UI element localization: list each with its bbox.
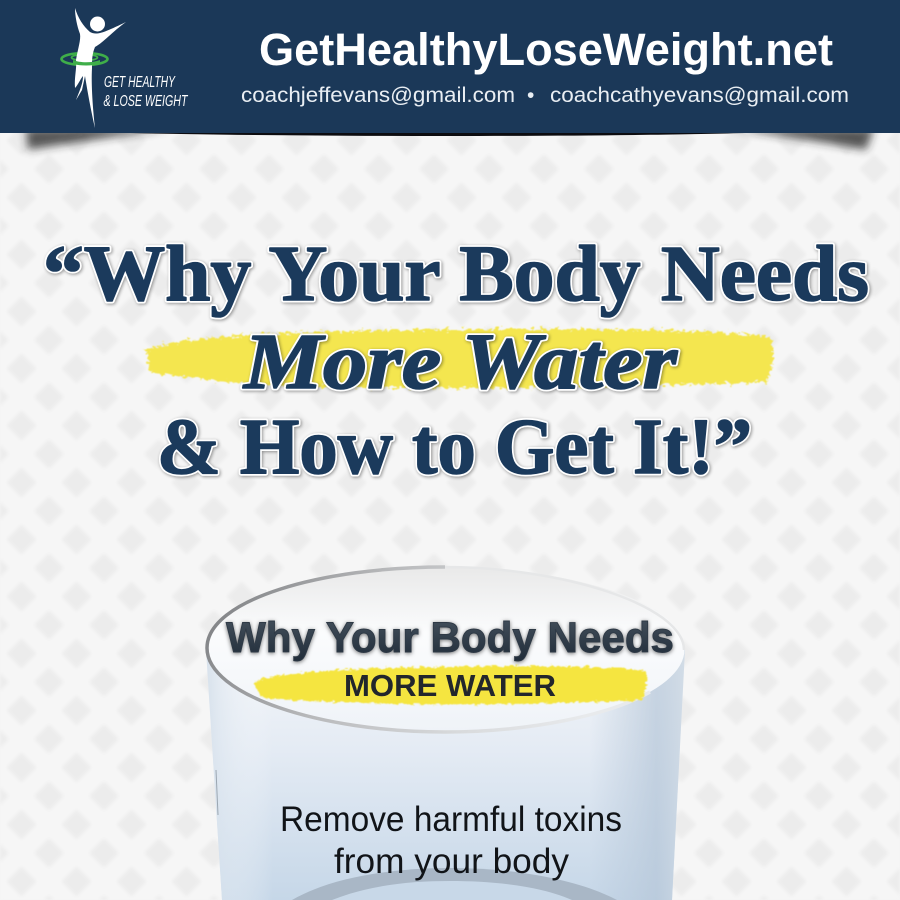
benefit text: from your body bbox=[334, 842, 569, 881]
title line 3: & How to Get It!” bbox=[157, 404, 752, 491]
header band bbox=[0, 0, 900, 133]
contact emails: • bbox=[527, 84, 534, 107]
glass subheading: MORE WATER bbox=[344, 668, 556, 703]
title line 2: More Water bbox=[242, 319, 678, 406]
title line 3: & How to Get It!” bbox=[157, 404, 752, 491]
contact emails: coachjeffevans@gmail.com bbox=[241, 84, 515, 107]
glass heading: Why Your Body Needs bbox=[226, 614, 674, 662]
water surface at bottom bbox=[292, 868, 617, 900]
logo text: GET HEALTHY bbox=[104, 74, 176, 91]
icon: figure with hula hoop bbox=[62, 8, 126, 128]
title line 2: More Water bbox=[242, 319, 678, 406]
contact emails bbox=[241, 84, 849, 107]
header shadow bbox=[26, 128, 874, 150]
glass rim bbox=[206, 567, 684, 732]
site name: GetHealthyLoseWeight.net bbox=[259, 24, 833, 75]
title line 1: “Why Your Body Needs bbox=[43, 231, 869, 318]
benefit text bbox=[280, 800, 622, 881]
logo: & LOSE WEIGHT bbox=[104, 93, 189, 110]
contact emails: coachcathyevans@gmail.com bbox=[550, 84, 849, 107]
main title bbox=[43, 231, 869, 491]
title line 1: “Why Your Body Needs bbox=[43, 231, 869, 318]
logo bbox=[62, 8, 189, 128]
glass body bbox=[206, 650, 685, 900]
benefit text: Remove harmful toxins bbox=[280, 800, 622, 839]
highlight brush stroke bbox=[146, 329, 773, 388]
glass bbox=[206, 567, 685, 900]
rim highlight stroke bbox=[254, 666, 647, 704]
